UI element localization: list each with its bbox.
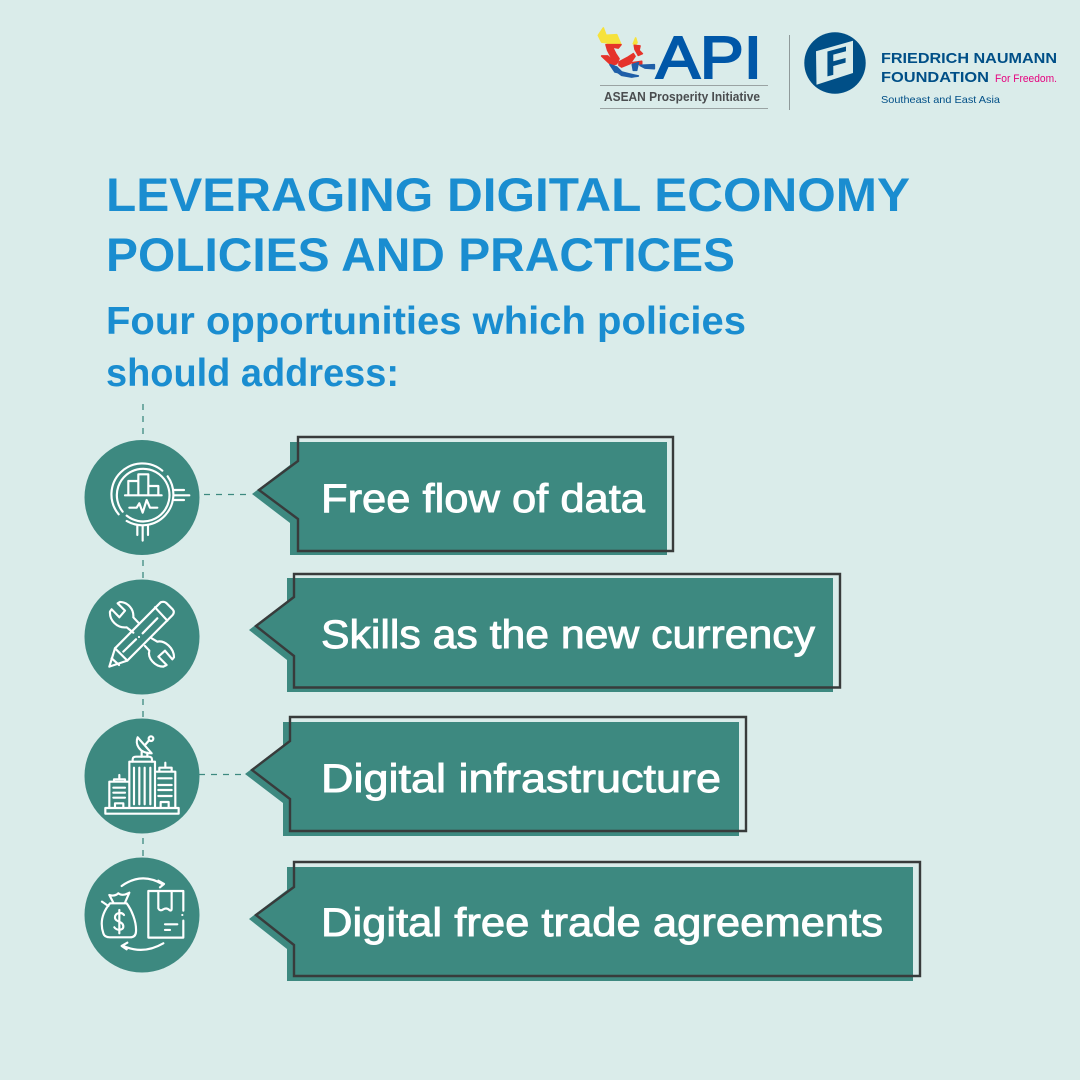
title: POLICIES AND PRACTICES (106, 228, 735, 281)
logo region: Southeast and East Asia (881, 94, 1000, 106)
logo caption: ASEAN Prosperity Initiative (604, 90, 760, 104)
logo name line one: FRIEDRICH NAUMANN (881, 51, 1057, 67)
item 1: free flow of data (84, 437, 673, 555)
icon: city with satellite dish (84, 718, 200, 834)
callout: free flow of data (252, 437, 673, 555)
logo name line two: FOUNDATION (881, 70, 989, 86)
callout: free flow of data: Free flow of data (321, 477, 646, 521)
item 4: digital free trade agreements (84, 858, 920, 981)
title (106, 168, 910, 281)
logo tagline: For Freedom. (995, 73, 1057, 85)
logo: ASEAN Prosperity Initiative (598, 25, 768, 109)
icon: FNF emblem (804, 32, 866, 94)
icon: wrench and pencil (84, 580, 200, 694)
connector lines (143, 404, 252, 857)
callout: digital free trade agreements: Digital free trade agreements (321, 901, 883, 945)
icon: data circle (84, 440, 200, 555)
subtitle: Four opportunities which policies (106, 300, 746, 343)
subtitle (106, 300, 746, 395)
subtitle: should address: (106, 352, 399, 395)
item 3: digital infrastructure (84, 717, 746, 836)
callout: digital infrastructure: Digital infrastructure (321, 757, 721, 801)
callout: skills: Skills as the new currency (321, 613, 815, 657)
item 2: skills (84, 574, 840, 694)
callout: skills (249, 574, 840, 692)
icon: FNF emblem: F (826, 39, 847, 84)
callout: digital infrastructure (245, 717, 746, 836)
logo wordmark API: API (656, 25, 762, 91)
title: LEVERAGING DIGITAL ECONOMY (106, 168, 910, 221)
callout: digital free trade agreements (249, 862, 920, 981)
icon: money bag and parcel exchange (84, 858, 200, 972)
logo: Friedrich Naumann Foundation (804, 32, 1057, 106)
icon: ASEAN map (598, 28, 654, 77)
